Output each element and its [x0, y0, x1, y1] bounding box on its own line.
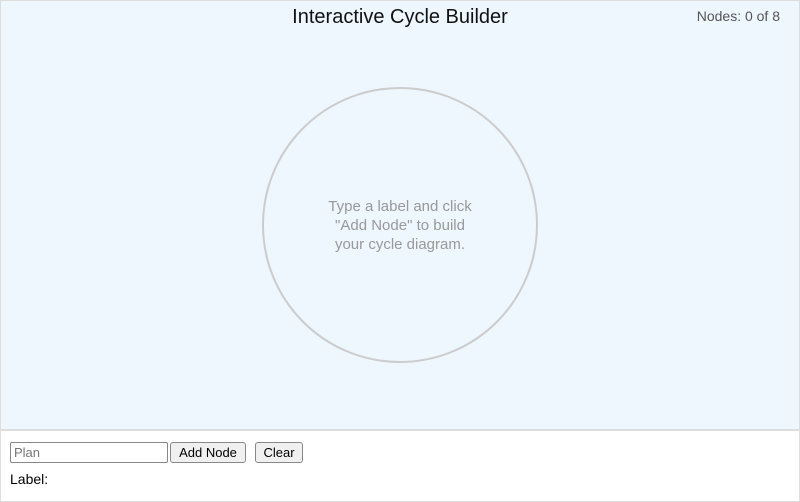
text input — [10, 442, 168, 463]
empty cycle circle — [262, 87, 538, 363]
instruction text: "Add Node" to build — [335, 217, 465, 234]
instruction text: your cycle diagram. — [335, 236, 465, 253]
instruction text: Type a label and click — [328, 198, 472, 215]
instruction text — [328, 198, 472, 253]
label text: Label: — [10, 471, 48, 487]
button: clear: Clear — [263, 445, 295, 460]
node counter: Nodes: 0 of 8 — [697, 8, 780, 24]
title: Interactive Cycle Builder — [292, 6, 508, 28]
button: clear — [255, 442, 303, 463]
button: add node: Add Node — [179, 445, 237, 460]
button: add node — [170, 442, 246, 463]
